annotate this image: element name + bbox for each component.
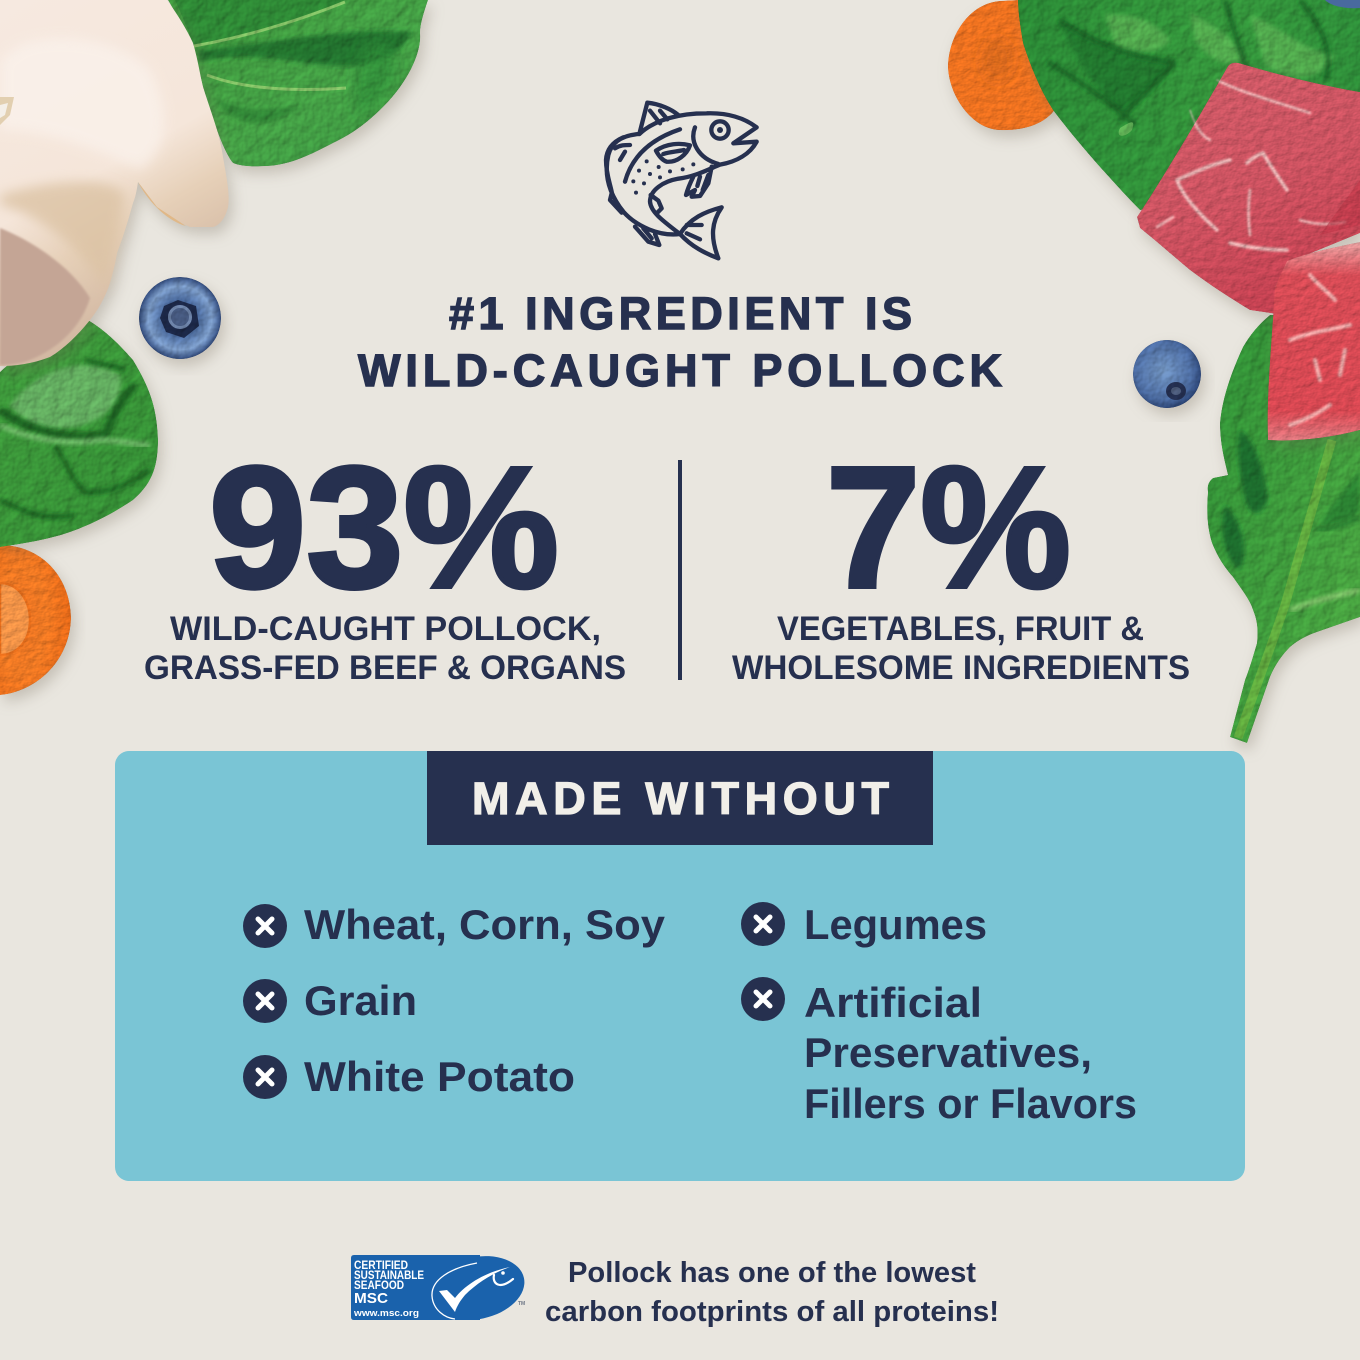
food: top-right carrot slice (948, 0, 1057, 130)
divider (678, 460, 682, 680)
footer note (545, 1257, 999, 1328)
stat: 7%: WHOLESOME INGREDIENTS (732, 649, 1190, 687)
heading: WILD-CAUGHT POLLOCK (358, 345, 1002, 396)
panel heading (427, 751, 933, 845)
stat: 7% (732, 430, 1190, 687)
footer note: carbon footprints of all proteins! (545, 1296, 999, 1328)
food: top-right spinach leaf (1018, 0, 1360, 210)
logo: MSC certified sustainable seafood: CERTIFIED (354, 1260, 408, 1272)
logo: MSC certified sustainable seafood: TM (518, 1301, 525, 1307)
logo: MSC certified sustainable seafood: www.msc.org (353, 1308, 419, 1319)
list item: artificial preservatives, fillers or flavors: Fillers or Flavors (804, 1080, 1137, 1127)
stat: 7%: 7% (826, 430, 1071, 624)
food: pollock fillet (0, 0, 229, 366)
food: blueberry peeking at top-right edge (1325, 0, 1360, 8)
heading (358, 288, 1002, 396)
food: left spinach leaf (0, 320, 158, 547)
panel: made without (115, 751, 1245, 1181)
logo: MSC certified sustainable seafood: SEAFOOD (354, 1280, 404, 1292)
list item: artificial preservatives, fillers or flavors: Artificial (804, 979, 982, 1026)
list item: grain: Grain (304, 977, 417, 1024)
list item: wheat, corn, soy: Wheat, Corn, Soy (304, 901, 666, 948)
stat: 93%: WILD-CAUGHT POLLOCK, (170, 610, 601, 648)
stat: 93%: 93% (209, 430, 559, 624)
list item: grain (243, 977, 417, 1024)
panel heading: MADE WITHOUT (472, 773, 889, 824)
food: top-left spinach leaf (168, 0, 428, 166)
list item: legumes: Legumes (804, 901, 987, 948)
stat: 7%: VEGETABLES, FRUIT & (777, 610, 1144, 648)
list item: white potato: White Potato (304, 1053, 575, 1100)
food: left blueberry (139, 277, 221, 359)
logo: MSC certified sustainable seafood (351, 1248, 530, 1328)
stat: 93%: GRASS-FED BEEF & ORGANS (144, 649, 626, 687)
stat: 93% (144, 430, 626, 687)
list item: artificial preservatives, fillers or flavors (741, 977, 1137, 1127)
logo: MSC certified sustainable seafood: SUSTAINABLE (354, 1270, 424, 1282)
list item: artificial preservatives, fillers or flavors: Preservatives, (804, 1029, 1092, 1076)
footer note: Pollock has one of the lowest (568, 1257, 976, 1289)
food: left carrot slice (0, 545, 71, 695)
food: beef cubes (1137, 63, 1360, 441)
icon: fish (606, 103, 757, 258)
food: right blueberry (1133, 340, 1201, 408)
heading: #1 INGREDIENT IS (449, 288, 912, 339)
food: right spinach leaf (1207, 315, 1360, 743)
logo: MSC certified sustainable seafood: MSC (354, 1290, 388, 1307)
